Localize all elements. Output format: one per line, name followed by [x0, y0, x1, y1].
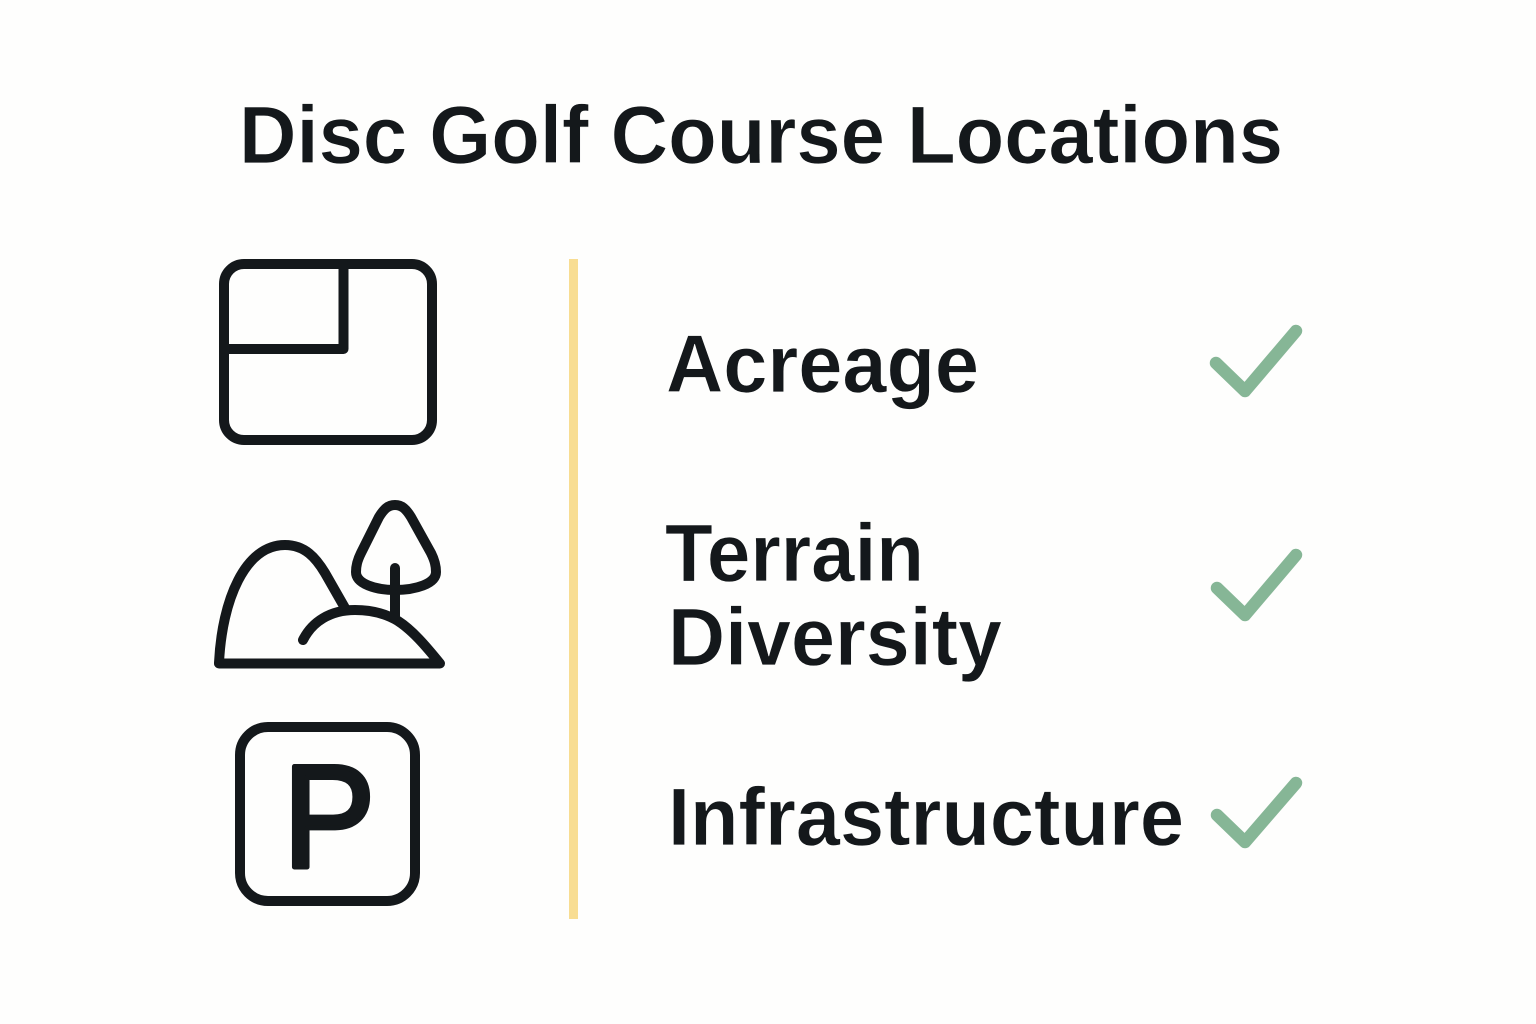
- label: infrastructure: Infrastructure: [668, 772, 1184, 863]
- icon: parking sign: [240, 727, 415, 901]
- vertical divider: [569, 259, 578, 919]
- label: acreage: Acreage: [666, 319, 979, 410]
- icon: parking sign: P: [283, 735, 375, 898]
- icon: check mark terrain: [1217, 555, 1296, 615]
- label: terrain diversity: Terrain: [665, 508, 924, 599]
- icon: check mark acreage: [1216, 331, 1296, 391]
- label: terrain diversity: [665, 508, 1002, 683]
- icon: check mark infrastructure: [1217, 783, 1296, 842]
- title: Disc Golf Course Locations: [239, 90, 1283, 181]
- label: terrain diversity: Diversity: [668, 592, 1002, 683]
- icon: acreage plot: [224, 264, 432, 440]
- icon: terrain hills and tree: [219, 505, 440, 664]
